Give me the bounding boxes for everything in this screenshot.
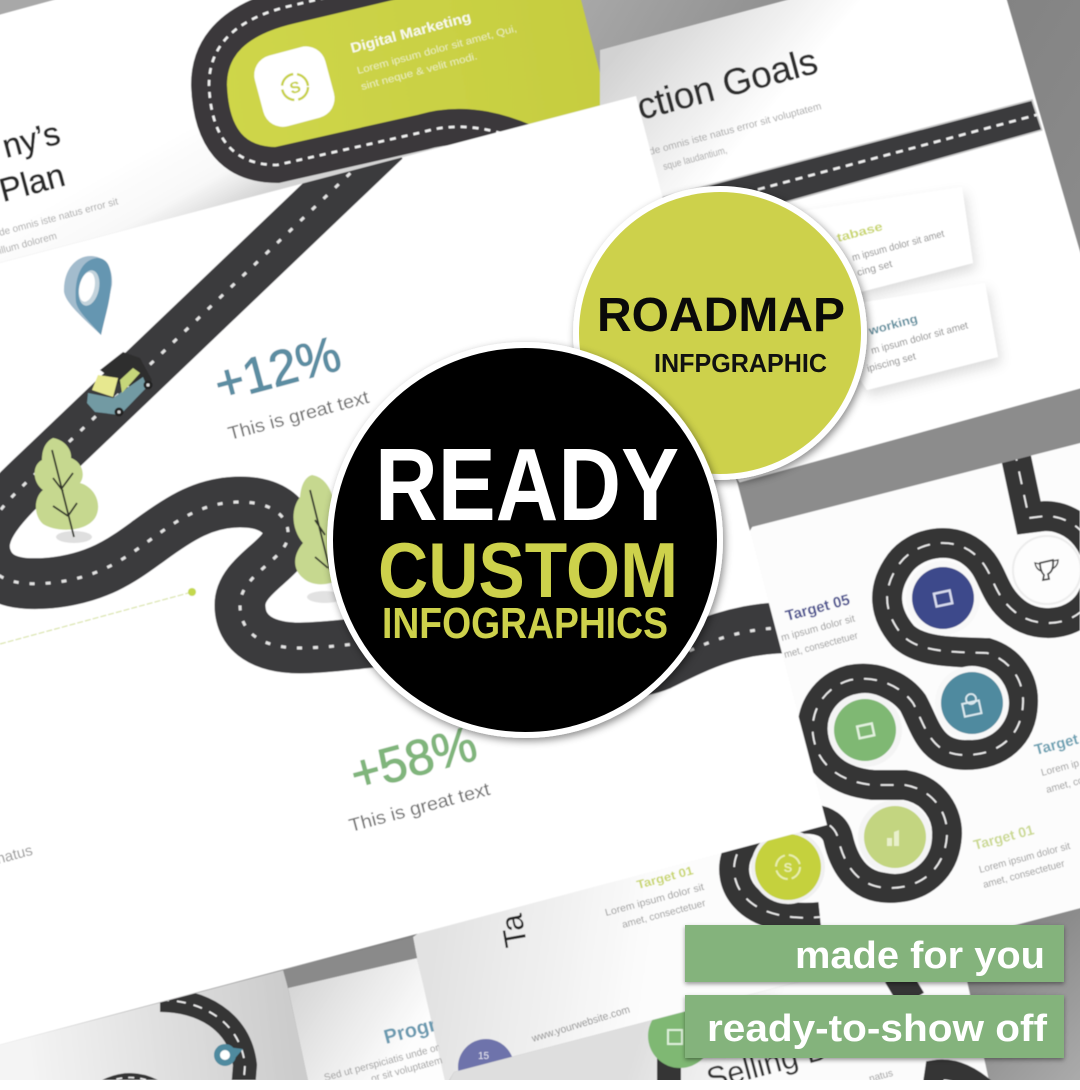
text: website: www.yourwebsite.com bbox=[529, 1004, 632, 1045]
callout line: green marker bbox=[0, 588, 196, 644]
card: networking: ipiscing set bbox=[866, 351, 917, 375]
badge: roadmap yellow circle: INFPGRAPHIC bbox=[654, 348, 827, 378]
bottom white strip bbox=[0, 1080, 1080, 1090]
icon: trophy circle bbox=[1013, 536, 1080, 604]
card: database: cing set bbox=[856, 259, 894, 279]
panel: production goals slide bbox=[600, 0, 1080, 483]
text: target teal: Lorem ip bbox=[1040, 758, 1080, 779]
icon: lime money circle: S bbox=[784, 860, 793, 875]
text: target 05 bbox=[780, 591, 860, 661]
bottom-right gray background bbox=[958, 903, 1080, 1090]
icon: tree left bbox=[35, 438, 98, 543]
badge: ready custom infographics black circle bbox=[330, 345, 720, 735]
icon: teal lock circle bbox=[935, 666, 1009, 740]
text: progress heading and description bbox=[324, 1020, 442, 1080]
text: digital marketing card copy bbox=[349, 8, 518, 93]
badge: roadmap yellow circle: ROADMAP bbox=[597, 289, 845, 342]
text: target 01 right: Target 01 bbox=[972, 821, 1036, 853]
text: selling description: natus bbox=[868, 1068, 894, 1085]
text: target 01 left: Target 01 bbox=[635, 863, 695, 892]
panel: bottom-left slide bbox=[0, 970, 310, 1090]
text: target teal: Target bbox=[1033, 731, 1080, 759]
icon: navy target 05 circle bbox=[906, 561, 980, 635]
icon: rounded square money cycle: S bbox=[288, 79, 303, 98]
icon: green blob bbox=[648, 1011, 704, 1069]
text: digital marketing card copy: Lorem ipsum dolor sit amet, Qui, bbox=[356, 24, 518, 77]
text: target 01 right bbox=[972, 821, 1072, 891]
gray band above targets slide bbox=[730, 383, 1080, 527]
text: progress heading and description: Progr bbox=[382, 1014, 439, 1049]
road: around yellow card bbox=[209, 0, 525, 165]
text: target 01 right: Lorem ipsum dolor sit bbox=[978, 841, 1072, 876]
text: progress heading and description: Sed ut perspiciatis unde om bbox=[323, 1041, 445, 1084]
card: database bbox=[790, 187, 973, 305]
icon: rounded square money cycle bbox=[250, 42, 339, 131]
panel: selling slide bbox=[449, 982, 992, 1080]
card: database: tabase bbox=[835, 219, 885, 245]
badge: roadmap yellow circle bbox=[576, 189, 864, 477]
badge: ready custom infographics black circle: INFOGRAPHICS bbox=[382, 599, 668, 648]
road: selling slide fragments bbox=[669, 975, 987, 1090]
icon: tree right bbox=[294, 475, 343, 603]
panel: main road slide bbox=[0, 96, 827, 1050]
card: networking: working bbox=[866, 311, 919, 338]
label: ready-to-show off bbox=[685, 995, 1064, 1058]
icon: location pin bbox=[64, 256, 112, 335]
label: made for you bbox=[685, 925, 1064, 982]
stat: +12%: This is great text bbox=[226, 386, 371, 444]
heading: production goals: ction Goals bbox=[632, 40, 822, 128]
road: winding s-curve around targets bbox=[734, 448, 1080, 918]
text: progress heading and description: or sit voluptatem bbox=[370, 1055, 444, 1085]
text: target 05: Target 05 bbox=[784, 591, 852, 625]
stat: +58%: +58% bbox=[344, 715, 482, 803]
heading: vertical title: Ta bbox=[494, 911, 534, 950]
stat: +12% bbox=[208, 325, 371, 444]
panel: top-left slide bbox=[0, 0, 636, 268]
text: digital marketing card copy: Digital Marketing bbox=[349, 8, 473, 56]
card: database: m ipsum dolor sit amet bbox=[851, 229, 946, 264]
icon: teal location ring bbox=[217, 1046, 243, 1064]
text block: goals description: sque laudantium, bbox=[662, 145, 729, 173]
text block: slide description: de omnis iste natus error sit bbox=[0, 196, 120, 239]
text: target 05: met, consectetuer bbox=[783, 630, 860, 661]
gray band: progress slide header bbox=[283, 937, 417, 988]
icon: car bbox=[87, 352, 152, 416]
heading: company plan title bbox=[0, 114, 69, 209]
label: made for you: made for you bbox=[795, 935, 1045, 977]
text: target 01 left: Lorem ipsum dolor sit bbox=[604, 882, 706, 919]
text block: goals description: de omnis iste natus error sit voluptatem bbox=[648, 101, 823, 158]
text: target teal bbox=[1033, 731, 1080, 796]
road: straight timeline bbox=[662, 98, 1043, 202]
panel: yellow digital marketing card bbox=[209, 0, 612, 165]
purple number badge: 15 bbox=[478, 1051, 490, 1062]
icon: lime money circle bbox=[751, 830, 825, 904]
text: target 05: m ipsum dolor sit bbox=[780, 614, 856, 644]
label: ready-to-show off: ready-to-show off bbox=[707, 1008, 1047, 1050]
road: bottom-left curve bbox=[84, 1000, 245, 1090]
text: target 01 left bbox=[604, 863, 707, 931]
text: target 01 left: amet, consectetuer bbox=[621, 898, 707, 931]
stat: +58%: This is great text bbox=[347, 778, 492, 836]
badge: ready custom infographics black circle: READY bbox=[375, 427, 679, 542]
text: digital marketing card copy: sint neque & velit modi. bbox=[360, 51, 479, 93]
text: target 01 right: amet, consectetuer bbox=[982, 858, 1067, 891]
panel: targets slide bbox=[413, 438, 1080, 1090]
purple number badge bbox=[458, 1038, 512, 1072]
heading: company plan title: ny’s bbox=[0, 114, 64, 165]
card: networking bbox=[815, 283, 998, 390]
icon: light green chart circle bbox=[858, 800, 932, 874]
road: main winding road bbox=[0, 140, 800, 673]
badge: ready custom infographics black circle: CUSTOM bbox=[378, 526, 678, 614]
card: networking: m ipsum dolor sit amet bbox=[870, 320, 970, 357]
panel: progress slide bbox=[283, 937, 447, 1090]
stat: +12%: +12% bbox=[208, 325, 346, 413]
stat: +58% bbox=[344, 715, 492, 836]
icon: green circle bbox=[828, 693, 902, 767]
